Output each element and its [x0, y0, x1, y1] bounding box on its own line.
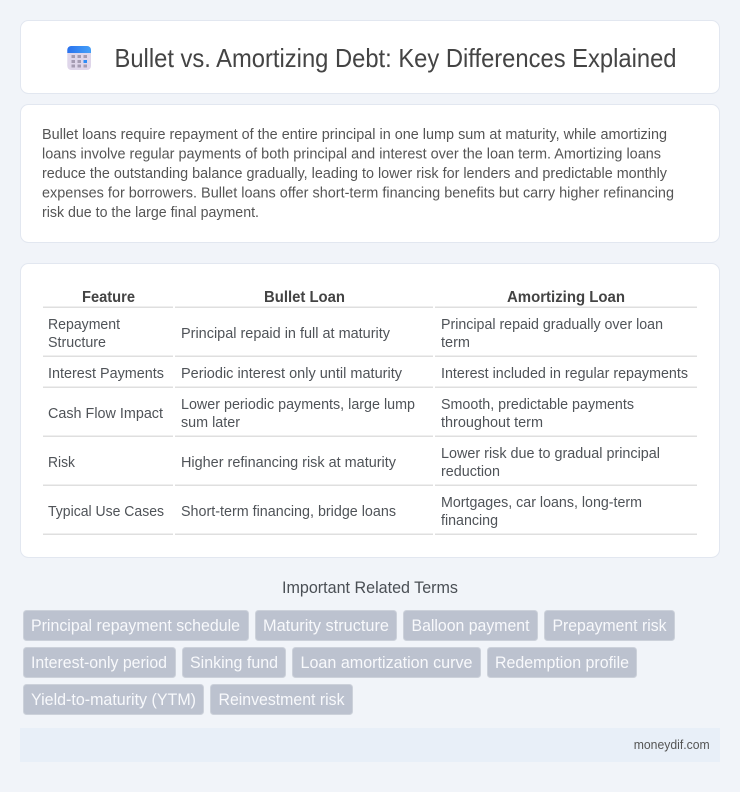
chip: interest-only period: Interest-only period — [31, 653, 167, 672]
row: risk — [48, 446, 660, 480]
table header row: Feature — [82, 289, 135, 306]
row: interest payments — [48, 366, 688, 382]
summary paragraph: risk due to the large final payment. — [42, 205, 259, 221]
footer source: moneydif.com — [634, 737, 710, 752]
chip: prepayment risk: Prepayment risk — [552, 616, 667, 635]
footer band — [20, 728, 720, 762]
row: cash flow impact: Cash Flow Impact — [48, 406, 163, 422]
row: repayment structure: Repayment — [48, 317, 120, 333]
summary paragraph: loans involve regular payments of both principal and interest over the loan term. Amortizing loans — [42, 146, 661, 162]
chip: principal repayment schedule: Principal repayment schedule — [31, 616, 240, 635]
panel: comparison table — [20, 264, 720, 558]
row: interest payments: Interest Payments — [48, 366, 164, 382]
table header row — [82, 289, 625, 306]
chip: loan amortization curve — [292, 648, 480, 678]
row: cash flow impact: sum later — [181, 415, 240, 431]
summary paragraph: expenses for borrowers. Bullet loans offer short-term financing benefits but carry higher refinancing — [42, 185, 674, 201]
row: repayment structure: Principal repaid gradually over loan — [441, 317, 663, 333]
row: cash flow impact: Lower periodic payments, large lump — [181, 397, 415, 413]
summary paragraph: Bullet loans require repayment of the entire principal in one lump sum at maturity, while amortizing — [42, 127, 667, 143]
row: typical use cases: Mortgages, car loans, long-term — [441, 495, 642, 511]
chip: sinking fund: Sinking fund — [190, 653, 278, 672]
row: cash flow impact: Smooth, predictable payments — [441, 397, 634, 413]
summary paragraph — [42, 127, 674, 221]
table header row: Amortizing Loan — [507, 289, 625, 306]
panel: summary text — [20, 104, 720, 242]
chip: loan amortization curve: Loan amortization curve — [300, 653, 472, 672]
row: typical use cases: Typical Use Cases — [48, 504, 164, 520]
panel: title header — [20, 20, 720, 94]
table header row: Bullet Loan — [264, 289, 345, 306]
chip: maturity structure: Maturity structure — [263, 616, 389, 635]
chip: reinvestment risk — [210, 684, 352, 714]
row: risk: reduction — [441, 464, 500, 480]
row: typical use cases — [48, 495, 642, 529]
row: repayment structure — [48, 317, 663, 351]
chip: balloon payment — [404, 610, 538, 640]
row: risk: Lower risk due to gradual principal — [441, 446, 660, 462]
chip: balloon payment: Balloon payment — [412, 616, 530, 635]
summary paragraph: reduce the outstanding balance gradually, leading to lower risk for lenders and predictable monthly — [42, 166, 668, 182]
row: interest payments: Interest included in regular repayments — [441, 366, 688, 382]
row: repayment structure: term — [441, 335, 470, 351]
chip: interest-only period — [24, 648, 176, 678]
row: repayment structure: Principal repaid in full at maturity — [181, 326, 391, 342]
row: repayment structure: Structure — [48, 335, 106, 351]
chip: reinvestment risk: Reinvestment risk — [218, 690, 345, 709]
row: risk: Higher refinancing risk at maturity — [181, 455, 397, 471]
heading: important related terms: Important Related Terms — [282, 579, 458, 597]
row: cash flow impact — [48, 397, 634, 431]
row: typical use cases: financing — [441, 513, 498, 529]
row: cash flow impact: throughout term — [441, 415, 543, 431]
title: Bullet vs. Amortizing Debt: Key Differences Explained — [114, 43, 676, 73]
related term chips — [24, 610, 674, 714]
chip: redemption profile: Redemption profile — [495, 653, 629, 672]
row: interest payments: Periodic interest only until maturity — [181, 366, 403, 382]
chip: yield-to-maturity: Yield-to-maturity (YTM) — [31, 690, 196, 709]
chip: yield-to-maturity — [24, 684, 204, 714]
chip: sinking fund — [182, 648, 286, 678]
chip: redemption profile — [488, 648, 636, 678]
icon: calendar — [67, 46, 91, 70]
chip: maturity structure — [256, 610, 396, 640]
chip: principal repayment schedule — [24, 610, 248, 640]
chip: prepayment risk — [544, 610, 674, 640]
row: typical use cases: Short-term financing, bridge loans — [181, 504, 396, 520]
row: risk: Risk — [48, 455, 76, 471]
